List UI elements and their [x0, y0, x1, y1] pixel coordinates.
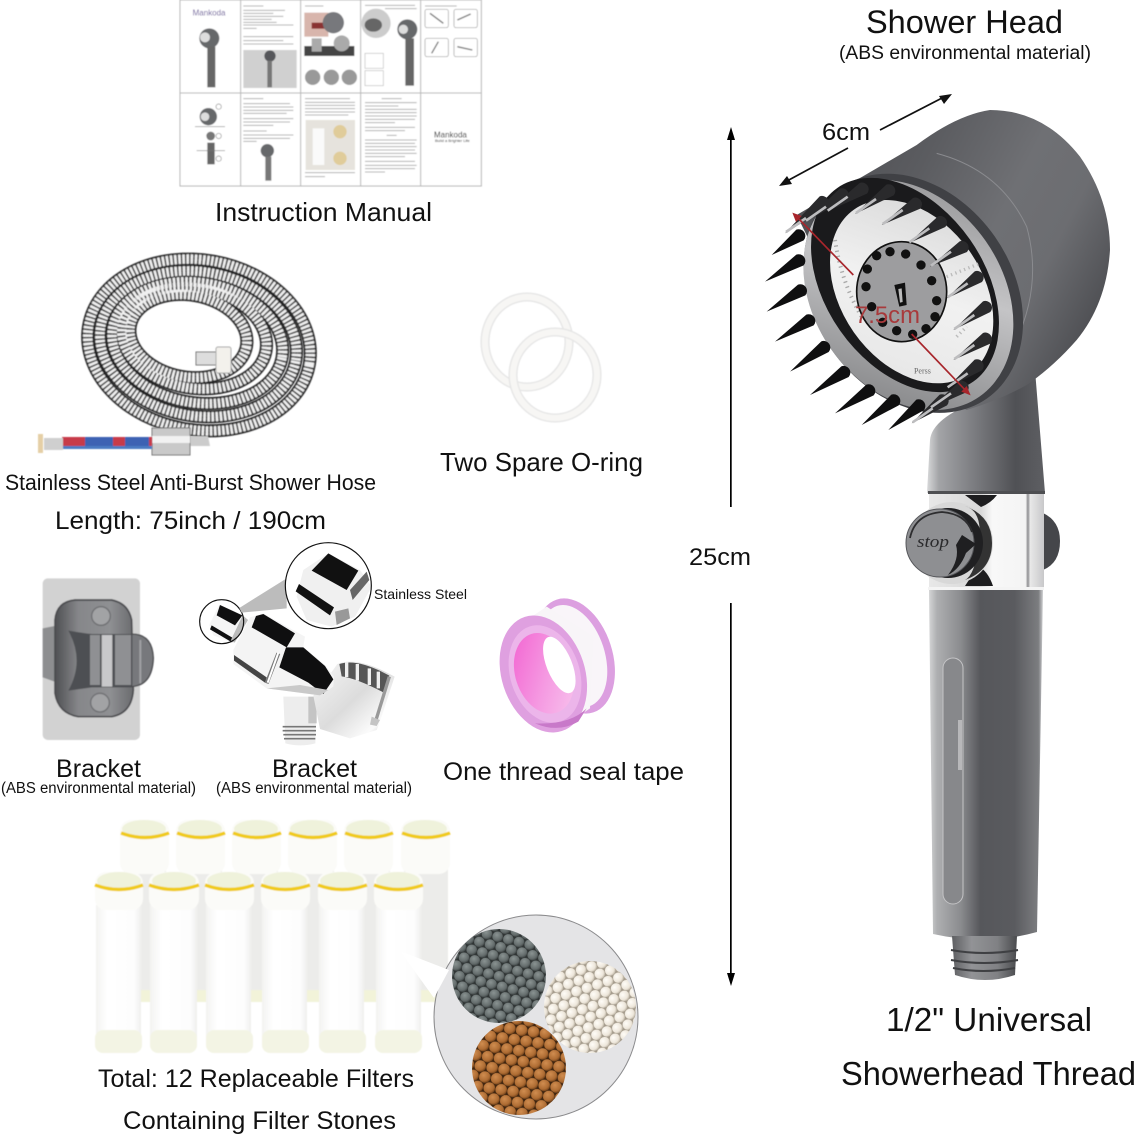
manual mini shower head one — [199, 28, 219, 87]
red diameter arrow — [792, 213, 971, 395]
stop button — [906, 502, 993, 584]
tape front flange — [485, 604, 601, 744]
dimension label: 7.5cm: 7.5cm — [855, 302, 920, 329]
manual back tagline: Build a Brighter Life — [435, 138, 471, 143]
magnifier cone — [239, 578, 287, 613]
magnifier circle — [285, 543, 372, 629]
manual brand logo: Mankoda — [193, 8, 226, 17]
head water face — [796, 169, 1027, 414]
o-ring caption: Two Spare O-ring — [440, 447, 643, 477]
head inner dark ring — [772, 143, 1038, 427]
hose ferrule — [152, 428, 210, 455]
threaded connector — [951, 936, 1018, 980]
grey filter stones — [452, 929, 546, 1023]
nozzle spikes chrome — [785, 183, 992, 423]
caption: bracket one: Bracket — [56, 755, 141, 783]
caption: thread size line two: Showerhead Thread — [841, 1055, 1136, 1092]
icon: chrome arm bracket — [200, 543, 395, 745]
heading: instruction manual label: Instruction Manual — [215, 197, 432, 227]
filters front row — [95, 872, 423, 1053]
manual photo: wall mount — [243, 50, 297, 88]
spray disc — [857, 242, 947, 342]
caption: seal tape: One thread seal tape — [443, 758, 684, 786]
handle neck — [927, 370, 1045, 493]
manual diagram: filter detail — [361, 9, 417, 86]
nozzle spikes black — [765, 229, 925, 430]
manual mini shower head two — [261, 144, 274, 181]
white filter stones — [544, 961, 636, 1053]
head rim shadow — [758, 131, 1068, 455]
subheading: shower head material: (ABS environmental material) — [839, 43, 1091, 64]
icon: thread seal tape — [485, 588, 629, 744]
head front rim — [760, 139, 1057, 451]
arrow: 25cm height dimension — [727, 127, 735, 986]
caption: thread size line one: 1/2" Universal — [886, 1001, 1092, 1038]
small detail ring — [200, 600, 244, 644]
bracket cradle — [313, 662, 395, 738]
callout: stainless steel: Stainless Steel — [374, 586, 467, 602]
hose caption line one: Stainless Steel Anti-Burst Shower Hose — [5, 470, 376, 495]
caption: filters line two: Containing Filter Stones — [123, 1107, 396, 1135]
manual text blocks — [243, 5, 457, 177]
head body — [797, 110, 1110, 410]
callout: filter stones circle — [400, 915, 638, 1119]
icon: two spare o-rings — [485, 297, 597, 418]
tape back rim — [521, 588, 629, 724]
tape white side — [522, 607, 593, 727]
lower handle — [929, 590, 1043, 940]
water window — [943, 658, 963, 904]
caption: bracket two material: (ABS environmental material) — [216, 780, 412, 797]
icon: replaceable filters group — [95, 820, 450, 1053]
head band groove — [937, 153, 1033, 400]
braided red and blue connector — [38, 434, 152, 453]
tape hole — [536, 632, 582, 698]
head assembly — [758, 110, 1110, 455]
filters back row — [120, 820, 450, 1002]
manual photo: filter packaging — [306, 120, 355, 170]
manual mini shower head exploded — [195, 104, 225, 164]
bracket barrel — [233, 613, 334, 695]
icon: shower head product — [758, 110, 1110, 980]
manual installation panels — [425, 9, 477, 57]
caption: filters line one: Total: 12 Replaceable Filters — [98, 1065, 414, 1093]
manual photo: hand installing filter — [304, 12, 357, 85]
arrow: 6cm width dimension — [779, 94, 952, 186]
callout pointer — [400, 951, 449, 998]
hose caption line two: Length: 75inch / 190cm — [55, 507, 326, 535]
dimension label: 6cm: 6cm — [822, 119, 870, 146]
bracket end nozzle — [209, 604, 248, 643]
icon: adhesive wall bracket — [43, 578, 153, 740]
head printed words: Perss — [914, 366, 931, 375]
bracket thread stub — [283, 697, 317, 745]
chrome collar — [928, 491, 1045, 590]
instruction manual sheet — [180, 0, 481, 186]
brown filter stones — [472, 1021, 566, 1115]
caption: bracket one material: (ABS environmental material) — [1, 780, 196, 797]
hose swivel nut — [196, 347, 231, 373]
tape pink inner core — [504, 625, 584, 721]
back button — [1043, 513, 1060, 570]
caption: bracket two: Bracket — [272, 755, 357, 783]
dimension label: 25cm: 25cm — [689, 544, 751, 571]
manual back brand logo: Mankoda — [434, 130, 467, 139]
icon: coiled steel hose — [38, 242, 324, 455]
stop label: stop — [917, 532, 949, 551]
heading: shower head: Shower Head — [866, 4, 1063, 40]
